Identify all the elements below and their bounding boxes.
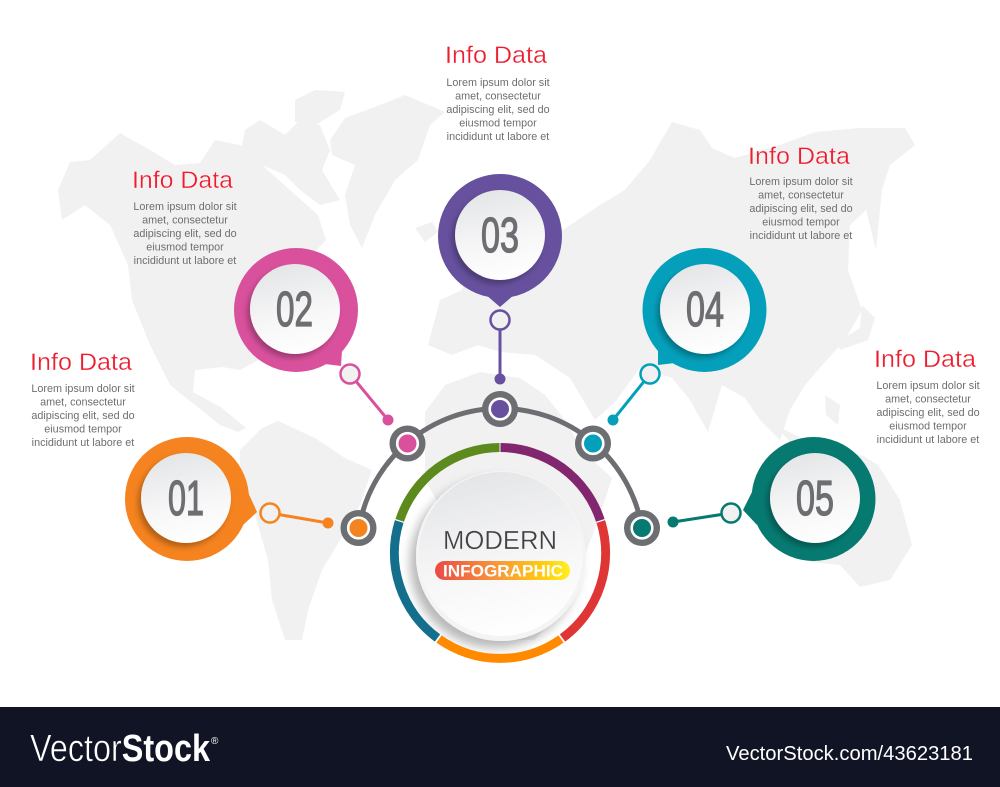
number 03: 03	[481, 209, 519, 263]
footer bar	[0, 707, 1000, 787]
text 01: adipiscing elit, sed do	[31, 410, 135, 422]
connector 02	[340, 364, 393, 425]
pin 03	[438, 174, 562, 307]
text 04: Lorem ipsum dolor sit	[749, 176, 853, 188]
text 04: adipiscing elit, sed do	[749, 203, 853, 215]
text 05: incididunt ut labore et	[877, 434, 979, 446]
connector 01	[260, 504, 333, 528]
text 05: amet, consectetur	[885, 394, 971, 406]
step 05	[627, 346, 980, 561]
text 03: eiusmod tempor	[459, 118, 537, 130]
heading pill: infographic: INFOGRAPHIC	[443, 562, 563, 580]
title 05: Info Data	[874, 346, 977, 373]
number 05: 05	[796, 472, 834, 526]
step 02	[132, 167, 422, 458]
world map	[58, 90, 915, 640]
text 04: amet, consectetur	[758, 190, 844, 202]
connector 05	[668, 504, 740, 527]
connector 03	[490, 310, 510, 384]
node 05	[627, 513, 657, 543]
segmented ring	[394, 448, 606, 658]
text 05: Lorem ipsum dolor sit	[876, 380, 980, 392]
step 04	[578, 143, 853, 458]
text 05: eiusmod tempor	[889, 420, 967, 432]
node 03	[485, 394, 515, 424]
heading: modern: MODERN	[443, 525, 557, 555]
footer logo: VectorStock	[30, 728, 211, 770]
node 01	[344, 513, 373, 543]
pin 05	[743, 437, 876, 561]
text 01: amet, consectetur	[40, 396, 126, 408]
text 01: eiusmod tempor	[44, 424, 122, 436]
arc connector	[359, 408, 642, 528]
step 03	[438, 42, 562, 424]
text 01: Lorem ipsum dolor sit	[31, 383, 135, 395]
text 02: Lorem ipsum dolor sit	[133, 201, 237, 213]
pin 04	[642, 248, 766, 372]
step 01	[30, 349, 373, 561]
title 04: Info Data	[748, 143, 851, 170]
text 04: eiusmod tempor	[762, 216, 840, 228]
text 03: adipiscing elit, sed do	[446, 104, 550, 116]
text 05: adipiscing elit, sed do	[876, 407, 980, 419]
text 02: incididunt ut labore et	[134, 255, 236, 267]
title 03: Info Data	[445, 42, 548, 69]
node 02	[393, 429, 422, 458]
text 04: incididunt ut labore et	[750, 230, 852, 242]
title 01: Info Data	[30, 349, 133, 376]
connector 04	[608, 364, 660, 425]
text 03: Lorem ipsum dolor sit	[446, 77, 550, 89]
footer id: VectorStock.com/43623181	[726, 743, 973, 765]
text 03: amet, consectetur	[455, 90, 541, 102]
number 04: 04	[686, 283, 724, 337]
pin 02	[234, 248, 358, 372]
registered mark: ®	[211, 736, 219, 747]
title 02: Info Data	[132, 167, 234, 194]
text 02: amet, consectetur	[142, 214, 228, 226]
text 03: incididunt ut labore et	[447, 131, 549, 143]
number 01: 01	[168, 472, 204, 526]
number 02: 02	[276, 283, 313, 337]
center disc	[416, 471, 586, 641]
text 02: eiusmod tempor	[146, 242, 224, 254]
text 01: incididunt ut labore et	[32, 437, 134, 449]
node 04	[578, 429, 608, 458]
pin 01	[125, 437, 257, 561]
text 02: adipiscing elit, sed do	[133, 228, 237, 240]
